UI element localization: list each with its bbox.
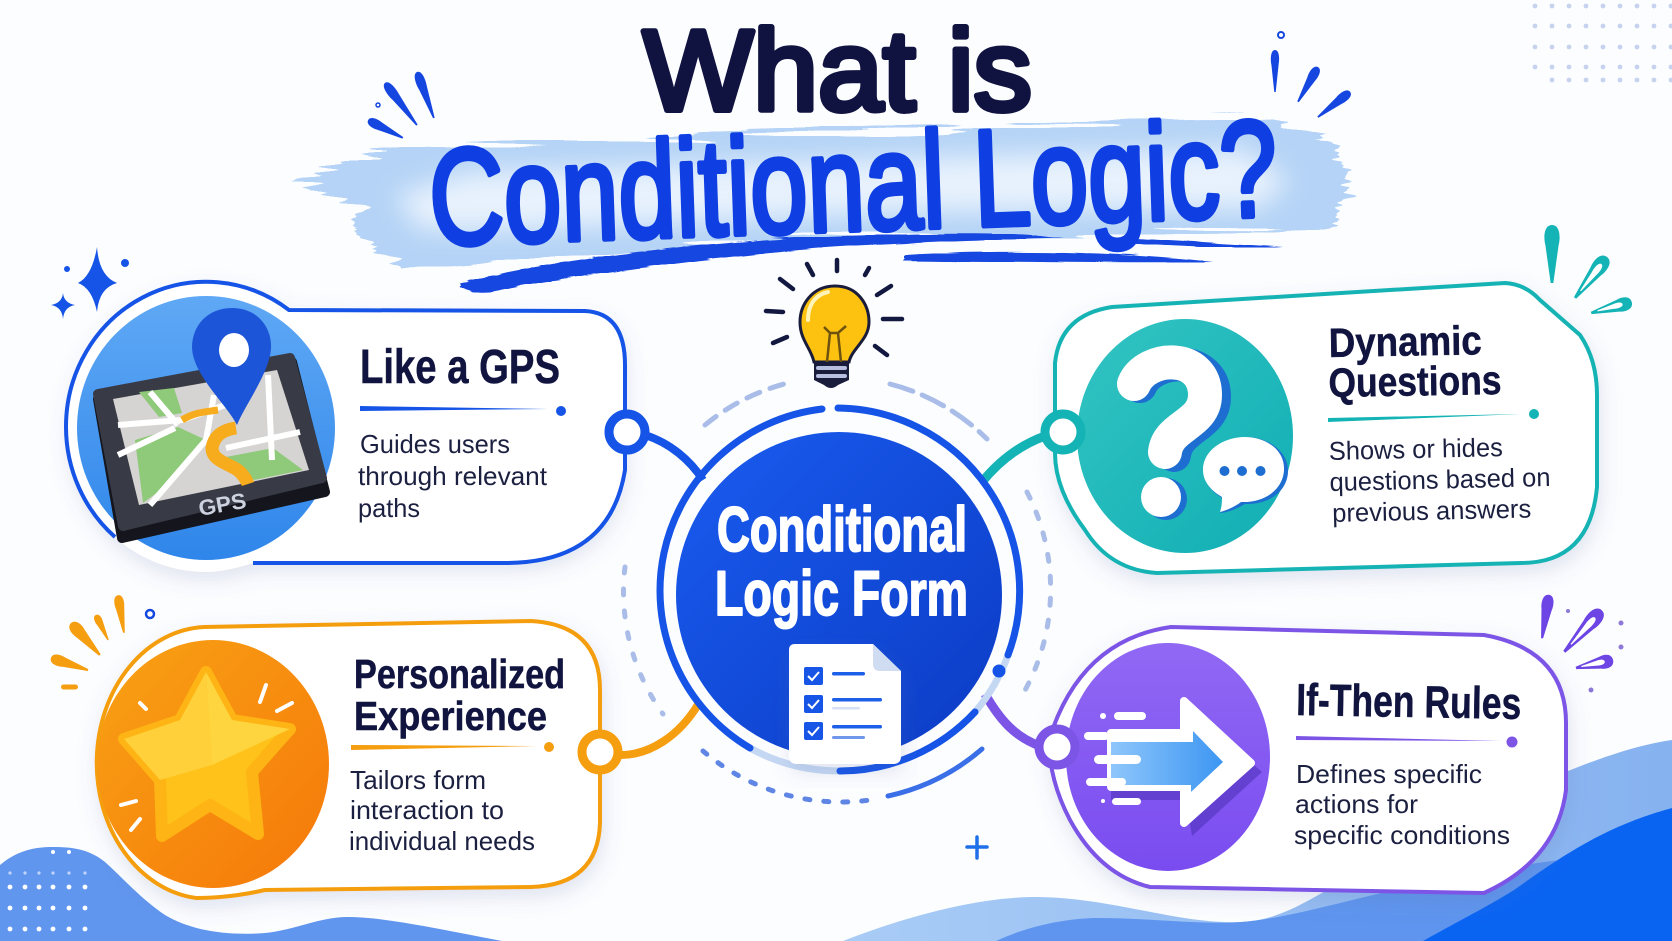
- icon disc: [1066, 643, 1270, 871]
- plus accent: [967, 837, 987, 858]
- connector: questions to hub: [982, 436, 1045, 482]
- wave: bottom right medium: [996, 810, 1672, 941]
- connector: personalized to hub: [618, 703, 699, 755]
- description: interaction to: [350, 795, 504, 825]
- divider: [1296, 736, 1518, 748]
- hub: blue disc: [676, 432, 1002, 758]
- panel: Dynamic Questions: [1055, 283, 1597, 573]
- heading: Dynamic: [1328, 317, 1482, 366]
- card outline: [1055, 283, 1597, 573]
- description: actions for: [1295, 789, 1418, 819]
- hub: label: Conditional: [717, 495, 967, 565]
- description: paths: [358, 493, 420, 523]
- divider: [351, 742, 554, 752]
- description: [358, 429, 548, 523]
- icon: map pin: [192, 308, 271, 425]
- hub: outer ring: [660, 408, 1020, 771]
- brush stroke behind title: [295, 116, 1350, 272]
- description: Shows or hides: [1328, 432, 1503, 466]
- heading: Questions: [1328, 357, 1502, 406]
- panel: Personalized Experience: [97, 621, 600, 898]
- description: [1328, 431, 1551, 528]
- node: rules: [1039, 729, 1075, 765]
- description: Tailors form: [350, 765, 486, 795]
- icon disc: [77, 296, 335, 560]
- icon disc: [97, 640, 329, 888]
- description: [1294, 759, 1510, 850]
- card outline: [66, 282, 625, 563]
- card fill: [66, 282, 625, 572]
- icon: GPS device: GPS: [197, 488, 248, 521]
- small ring accent: [146, 610, 154, 618]
- heading: Personalized: [354, 651, 565, 697]
- heading: If-Then Rules: [1296, 674, 1522, 729]
- description: Defines specific: [1296, 759, 1482, 789]
- icon: speech bubble: [1203, 437, 1288, 513]
- heading: [1327, 317, 1502, 406]
- icon: question mark: [1134, 362, 1214, 520]
- burst: title left: [366, 70, 438, 142]
- burst: title right: [1271, 32, 1353, 121]
- title line 1: What is: [643, 8, 1032, 135]
- wave: bottom left with dots: [0, 847, 502, 941]
- burst: personalized: [49, 594, 129, 690]
- dot pattern: top right: [1533, 4, 1672, 82]
- hub: label: Logic Form: [715, 559, 968, 629]
- hub: label: [715, 495, 968, 629]
- underline brush strokes: [459, 234, 1283, 292]
- icon: GPS device: [98, 358, 325, 538]
- heading: Like a GPS: [360, 341, 560, 394]
- node: GPS: [609, 414, 645, 450]
- divider: [1328, 409, 1539, 422]
- description: individual needs: [349, 826, 535, 856]
- hub: dashed orbit: [624, 382, 1051, 802]
- heading: Experience: [354, 693, 547, 739]
- icon disc: [1077, 319, 1293, 553]
- burst: rules: [1536, 594, 1624, 692]
- panel: Like a GPS: [66, 282, 625, 572]
- description: through relevant: [358, 461, 548, 491]
- hub: form document icon: [789, 644, 901, 764]
- description: Guides users: [360, 429, 510, 459]
- burst: questions: [1544, 225, 1634, 320]
- description: questions based on: [1329, 462, 1551, 497]
- description: [349, 765, 535, 856]
- lightbulb icon: [766, 260, 902, 388]
- card outline: [97, 621, 600, 898]
- title line 2: Conditional Logic?: [427, 92, 1280, 275]
- sparkles: GPS: [51, 247, 129, 319]
- connector: rules to hub: [985, 694, 1040, 746]
- node: questions: [1045, 414, 1081, 450]
- node: personalized: [582, 734, 618, 770]
- divider: [360, 406, 566, 416]
- panel: If-Then Rules: [1049, 627, 1566, 893]
- description: previous answers: [1332, 493, 1531, 528]
- icon: speed arrow: [1084, 701, 1262, 836]
- card outline: [1049, 627, 1566, 893]
- description: specific conditions: [1294, 820, 1510, 850]
- wave: bottom right dark: [1423, 808, 1672, 941]
- icon: star: [121, 672, 292, 836]
- wave: bottom right light: [843, 740, 1672, 941]
- heading: [354, 651, 565, 739]
- connector: GPS to hub: [645, 435, 703, 480]
